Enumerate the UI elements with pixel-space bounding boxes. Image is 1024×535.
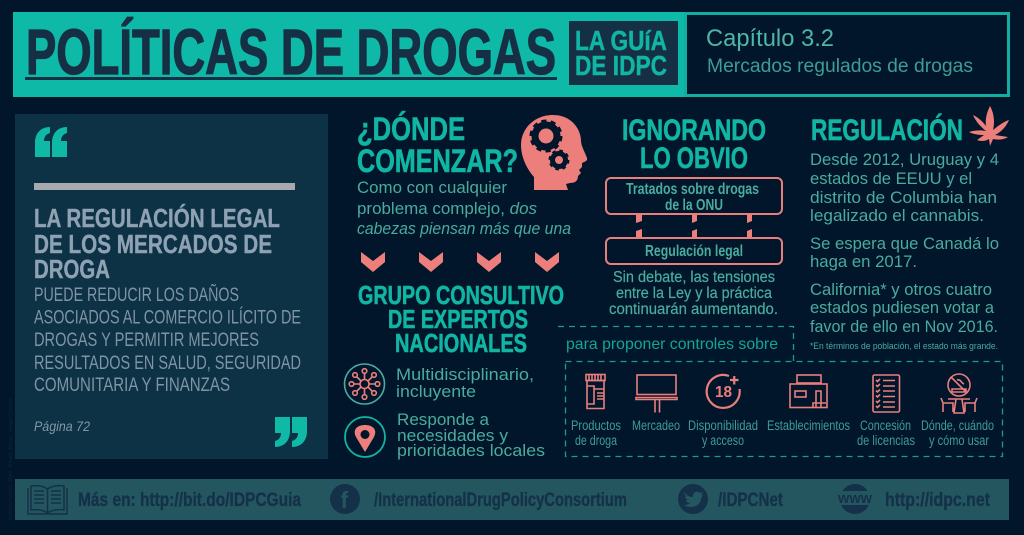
quote body: ASOCIADOS AL COMERCIO ILÍCITO DE [34, 308, 301, 328]
heading: expert group: DE EXPERTOS [388, 304, 528, 334]
icon: twitter [678, 484, 708, 514]
heading: ignoring the obvious: IGNORANDO [622, 114, 766, 147]
label: establishments: Establecimientos [767, 418, 850, 433]
icon: closing quotation mark [275, 417, 307, 447]
text: regulation: distrito de Columbia han [810, 188, 997, 207]
chapter box [686, 14, 1008, 96]
quote body [34, 284, 301, 396]
text: where to start: cabezas piensan más que una [357, 219, 571, 238]
text: multidisciplinary: incluyente [396, 382, 476, 401]
guide badge: LA GUíA [575, 25, 667, 56]
icon: age limit: 18 [715, 384, 732, 401]
text: tensions: entre la Ley y la práctica [616, 285, 772, 302]
label: availability: y acceso [702, 433, 744, 448]
heading: ignoring the obvious: LO OBVIO [640, 142, 748, 175]
box: treaties: de la ONU [665, 197, 723, 214]
heading: where to start: COMENZAR? [357, 143, 518, 179]
text: regulation: Se espera que Canadá lo [810, 234, 999, 253]
link: guide: Más en: http://bit.do/IDPCGuia [78, 490, 301, 511]
box: treaties: Tratados sobre drogas [626, 181, 759, 198]
text: regulation: estados pudiesen votar a [810, 298, 995, 317]
label: availability: Disponibilidad [688, 418, 758, 433]
text: regulation [810, 150, 999, 336]
footer bar [15, 479, 1009, 520]
text: local priorities: necesidades y [397, 426, 509, 445]
label: where and when: y cómo usar [929, 433, 989, 448]
diagram: treaties versus regulation [606, 178, 782, 264]
icon: chevrons [361, 252, 559, 272]
icon: location pin [345, 417, 385, 457]
quote heading: LA REGULACIÓN LEGAL [34, 203, 280, 233]
text: multidisciplinary: Multidisciplinario, [396, 365, 534, 384]
text: regulation: haga en 2017. [810, 252, 917, 271]
heading: ignoring the obvious [622, 114, 766, 175]
icon: no smoking table [941, 374, 977, 413]
heading: regulation: REGULACIÓN [811, 113, 963, 147]
text: local priorities: prioridades locales [397, 441, 545, 460]
text: multidisciplinary [396, 365, 534, 401]
box: legal regulation: Regulación legal [645, 243, 743, 260]
quote body: DROGAS Y PERMITIR MEJORES [34, 330, 259, 351]
text: tensions [609, 269, 778, 318]
icon: age limit [707, 375, 740, 408]
label: marketing: Mercadeo [632, 418, 680, 433]
quote heading: DROGA [34, 254, 110, 284]
text: regulation: legalizado el cannabis. [810, 206, 984, 225]
icon: book [28, 486, 67, 514]
box: legal regulation [606, 238, 782, 264]
heading: where to start: ¿DÓNDE [357, 111, 465, 147]
text: regulation: favor de ello en Nov 2016. [810, 317, 998, 336]
icon: facebook [330, 484, 360, 514]
quote body: COMUNITARIA Y FINANZAS [34, 375, 230, 396]
label: drug product [571, 418, 621, 448]
text: regulation: Desde 2012, Uruguay y 4 [810, 150, 999, 169]
icon: licensing [873, 375, 900, 412]
label: where and when [921, 418, 994, 448]
label: licences: de licencias [857, 433, 915, 448]
text: local priorities [397, 410, 545, 460]
label: availability [688, 418, 758, 448]
icon: head with gears [521, 115, 587, 190]
heading: expert group: GRUPO CONSULTIVO [358, 280, 564, 310]
icon: billboard [636, 375, 677, 412]
panel: controls [558, 326, 1002, 456]
box: treaties [606, 178, 782, 214]
text: where to start: Como con cualquier [357, 178, 507, 197]
label: drug product: de droga [575, 433, 617, 448]
icon: opening quotation mark [35, 127, 67, 157]
page reference: Página 72 [34, 418, 90, 434]
text: regulation: California* y otros cuatro [810, 280, 992, 299]
credits: Icons by freepik, Stem, Yohann Berger, Gregor Cresnar [8, 397, 14, 520]
quote heading [34, 203, 280, 284]
heading: expert group [358, 280, 564, 358]
text: where to start: problema complejo, dos [357, 199, 537, 218]
icon: website [837, 484, 872, 514]
chapter box: Mercados regulados de drogas [707, 56, 973, 77]
guide badge: DE IDPC [575, 50, 667, 81]
text: local priorities: Responde a [397, 410, 490, 429]
icon: establishment [790, 375, 827, 408]
icon: network [344, 364, 384, 404]
icon: facebook: f [340, 487, 348, 513]
link: facebook: /InternationalDrugPolicyConsortium [374, 490, 627, 511]
icon: cannabis leaf [969, 106, 1009, 146]
heading: where to start [357, 111, 518, 179]
label: drug product: Productos [571, 418, 621, 433]
label: where and when: Dónde, cuándo [921, 418, 994, 433]
quote body: RESULTADOS EN SALUD, SEGURIDAD [34, 353, 301, 374]
broken connectors [636, 214, 752, 238]
text: regulation: estados de EEUU y el [810, 169, 972, 188]
chapter box: Capítulo 3.2 [706, 25, 834, 52]
controls heading: para proponer controles sobre [566, 336, 778, 353]
text: tensions: Sin debate, las tensiones [613, 269, 775, 286]
quote body: PUEDE REDUCIR LOS DAÑOS [34, 284, 239, 306]
text: tensions: continuarán aumentando. [609, 301, 778, 318]
link: website: http://idpc.net [885, 490, 991, 511]
guide badge [569, 21, 678, 85]
quote heading: DE LOS MERCADOS DE [34, 229, 272, 259]
footnote: *En términos de población, el estado más grande. [810, 341, 998, 351]
panel: quote [15, 114, 328, 459]
title: POLÍTICAS DE DROGAS [26, 16, 556, 88]
icon: website: www [837, 490, 872, 507]
label: licences [857, 418, 915, 448]
label: licences: Concesión [860, 418, 911, 433]
link: twitter: /IDPCNet [718, 490, 784, 511]
header banner [13, 12, 685, 97]
heading: expert group: NACIONALES [395, 328, 527, 358]
text: where to start [357, 178, 571, 238]
icon: drug product [586, 374, 605, 408]
